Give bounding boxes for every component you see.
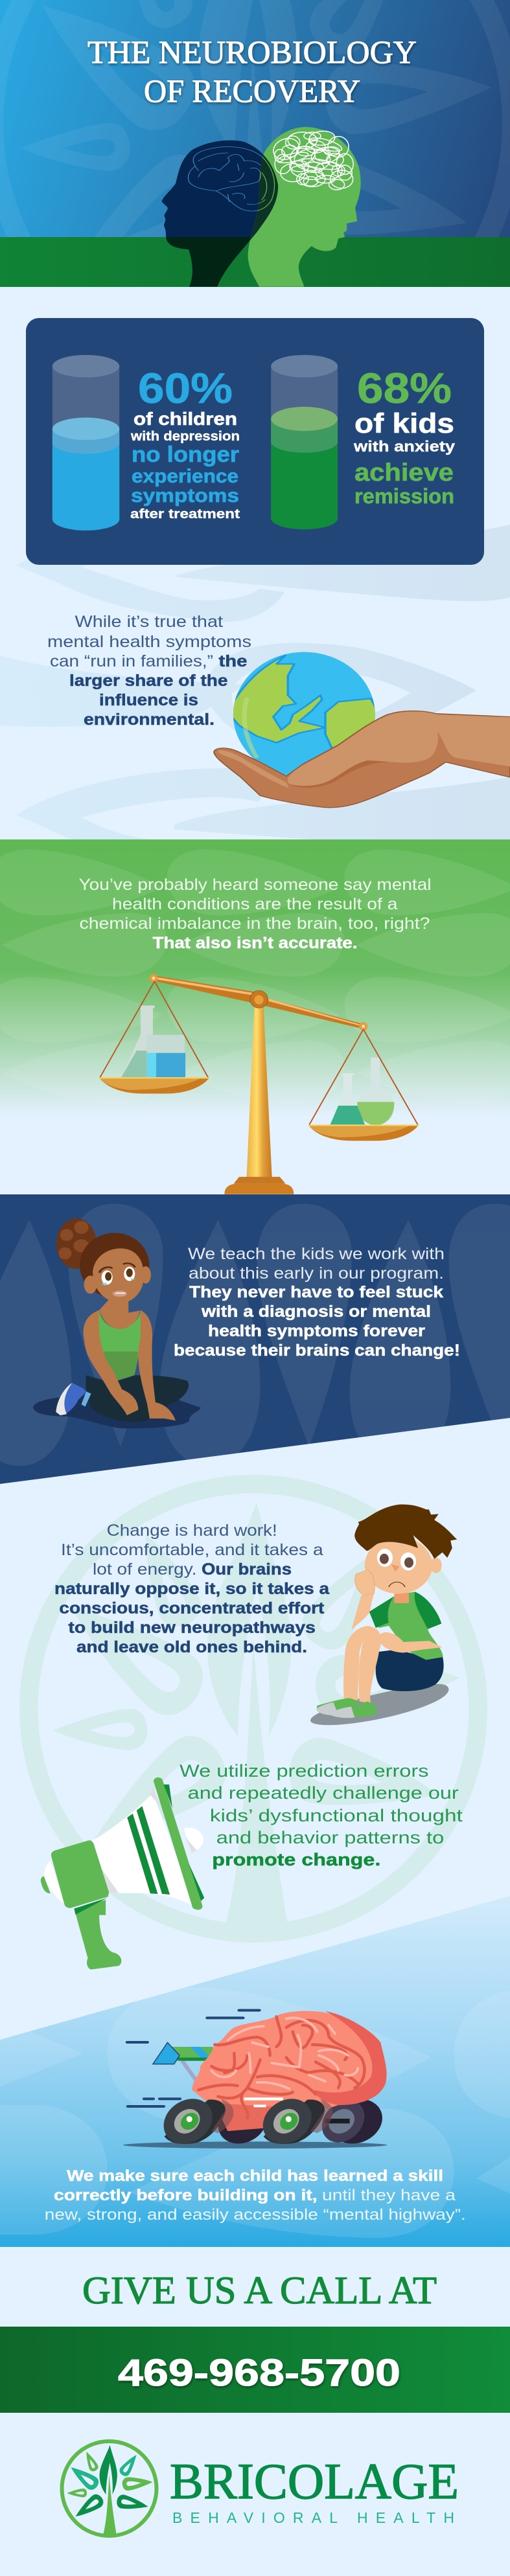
text: prediction errors: and behavior patterns to <box>216 1828 444 1847</box>
text: mental highway: new, strong, and easily accessible “mental highway”. <box>45 2206 466 2224</box>
illustration: sad girl sitting <box>33 1218 201 1428</box>
text: environment paragraph <box>47 613 251 729</box>
front wheels <box>156 2095 333 2147</box>
title <box>87 41 417 106</box>
icon: hand <box>214 711 510 808</box>
beam <box>154 975 364 1029</box>
text: change is hard work: lot of energy. <box>93 1560 197 1579</box>
text: 68% stat: with anxiety <box>353 438 455 455</box>
text: kids can change: They never have to feel stuck <box>189 1283 443 1301</box>
text: 68% stat: achieve <box>354 459 454 486</box>
illustration: megaphone <box>41 1777 204 1970</box>
text: 68% stat: remission <box>354 484 454 508</box>
text: change is hard work: It’s uncomfortable, and it takes a <box>61 1541 323 1559</box>
text: kids can change: because their brains can change! <box>174 1341 460 1360</box>
text: environment paragraph: mental health symptoms <box>47 633 251 651</box>
panel: navy brains can change section <box>0 1194 510 1484</box>
text: change is hard work: naturally oppose it, so it takes a <box>54 1580 330 1598</box>
right strings and pan <box>308 1029 419 1141</box>
chart: 68% cylinder <box>271 355 338 529</box>
text: 60% stat: of children <box>133 409 237 429</box>
text: mental highway: We make sure each child has learned a skill <box>67 2167 443 2185</box>
tagline: BEHAVIORAL HEALTH <box>172 2509 454 2526</box>
text: mental highway <box>45 2167 466 2224</box>
left flasks <box>121 1005 185 1078</box>
text: 60% stat: with depression <box>130 429 240 444</box>
illustration: sad boy sitting <box>310 1505 457 1725</box>
text: 60% stat: after treatment <box>130 507 240 521</box>
text: 60% stat: no longer <box>132 442 239 467</box>
text: change is hard work: conscious, concentrated effort <box>59 1599 325 1617</box>
watermark: large logo behind change section <box>29 1484 478 1933</box>
text: kids can change: We teach the kids we work with <box>188 1245 445 1263</box>
brain body <box>192 2011 387 2131</box>
text: prediction errors: promote change. <box>212 1850 380 1869</box>
hero watermark logo <box>0 0 510 237</box>
icon: tangled scribble brain <box>269 130 353 190</box>
speed lines <box>126 2009 261 2108</box>
background leaves <box>0 850 510 1026</box>
title: THE NEUROBIOLOGY <box>87 34 417 70</box>
rear wheels <box>211 2095 389 2148</box>
left strings and pan <box>99 981 209 1093</box>
text: chemical imbalance: chemical imbalance in the brain, too, right? <box>79 915 430 933</box>
panel: hero header <box>0 0 510 287</box>
wordmark: BRICOLAGE <box>170 2453 459 2509</box>
text: environment paragraph: the <box>219 652 248 670</box>
text: 68% stat <box>353 364 455 508</box>
text: environment paragraph: can “run in families,” <box>50 652 213 670</box>
right flasks <box>330 1058 394 1125</box>
arms <box>83 1310 138 1415</box>
shoe <box>57 1383 86 1415</box>
text: environment paragraph: While it’s true that <box>75 613 223 631</box>
text: chemical imbalance: health conditions are the result of a <box>112 895 398 913</box>
heading: give us a call: GIVE US A CALL AT <box>82 2269 437 2312</box>
text: 60% stat: 60% <box>138 364 233 412</box>
headlights <box>244 2097 283 2107</box>
phone band <box>0 2327 510 2413</box>
panel: statistics <box>26 318 484 565</box>
text: mental highway: until they have a <box>322 2187 456 2204</box>
text: change is hard work: to build new neuropathways <box>68 1619 316 1637</box>
text: prediction errors: kids’ dysfunctional thought <box>210 1806 463 1825</box>
text: kids can change: about this early in our program. <box>189 1264 444 1282</box>
spoiler <box>153 2042 213 2081</box>
text: change is hard work: Change is hard work! <box>107 1522 277 1540</box>
chart: 60% cylinder <box>52 355 119 530</box>
post <box>247 1007 272 1178</box>
text: mental highway: correctly before building on it, <box>54 2187 318 2204</box>
text: prediction errors <box>180 1761 463 1869</box>
text: prediction errors: We utilize prediction errors <box>180 1761 429 1781</box>
text: kids can change: with a diagnosis or mental <box>201 1303 431 1321</box>
phone number: 469-968-5700 <box>118 2352 400 2394</box>
logo: Bricolage Behavioral Health <box>62 2441 459 2536</box>
panel: brain car section <box>0 1896 510 2247</box>
illustration: hand holding globe <box>214 652 510 808</box>
background watermark: environment section leaves <box>0 511 510 839</box>
background spires <box>0 1203 510 1466</box>
title: OF RECOVERY <box>144 73 360 109</box>
illustration: balance scale with flasks <box>99 974 419 1194</box>
text: kids can change <box>174 1245 460 1360</box>
text: environment paragraph: larger share of the <box>69 672 228 690</box>
text: 60% stat: symptoms <box>131 485 239 507</box>
icon: globe <box>227 652 380 777</box>
text: 60% stat <box>130 364 240 521</box>
text: change is hard work <box>54 1522 330 1656</box>
text: 68% stat: of kids <box>354 408 454 439</box>
text: environment paragraph: influence is <box>99 691 198 709</box>
text: environment paragraph: environmental. <box>84 711 214 729</box>
text: change is hard work: Our brains <box>202 1560 292 1579</box>
text: 68% stat: 68% <box>357 364 452 412</box>
green band <box>0 237 510 287</box>
panel: green chemical imbalance section <box>0 839 510 1194</box>
text: prediction errors: and repeatedly challenge our <box>188 1783 459 1803</box>
illustration: brain on wheels <box>123 2009 389 2149</box>
jeans <box>86 1375 189 1422</box>
text: chemical imbalance <box>79 876 432 952</box>
text: chemical imbalance: That also isn’t accurate. <box>153 934 358 952</box>
text: change is hard work: and leave old ones behind. <box>76 1638 307 1656</box>
tank top <box>98 1310 143 1382</box>
text: kids can change: health symptoms forever <box>208 1322 425 1340</box>
illustration: two heads with brains <box>161 127 361 287</box>
background leaves <box>0 1987 510 2238</box>
text: 60% stat: experience <box>132 466 238 487</box>
icon: tree in circle <box>62 2441 157 2536</box>
text: chemical imbalance: You’ve probably heard someone say mental <box>79 876 432 894</box>
